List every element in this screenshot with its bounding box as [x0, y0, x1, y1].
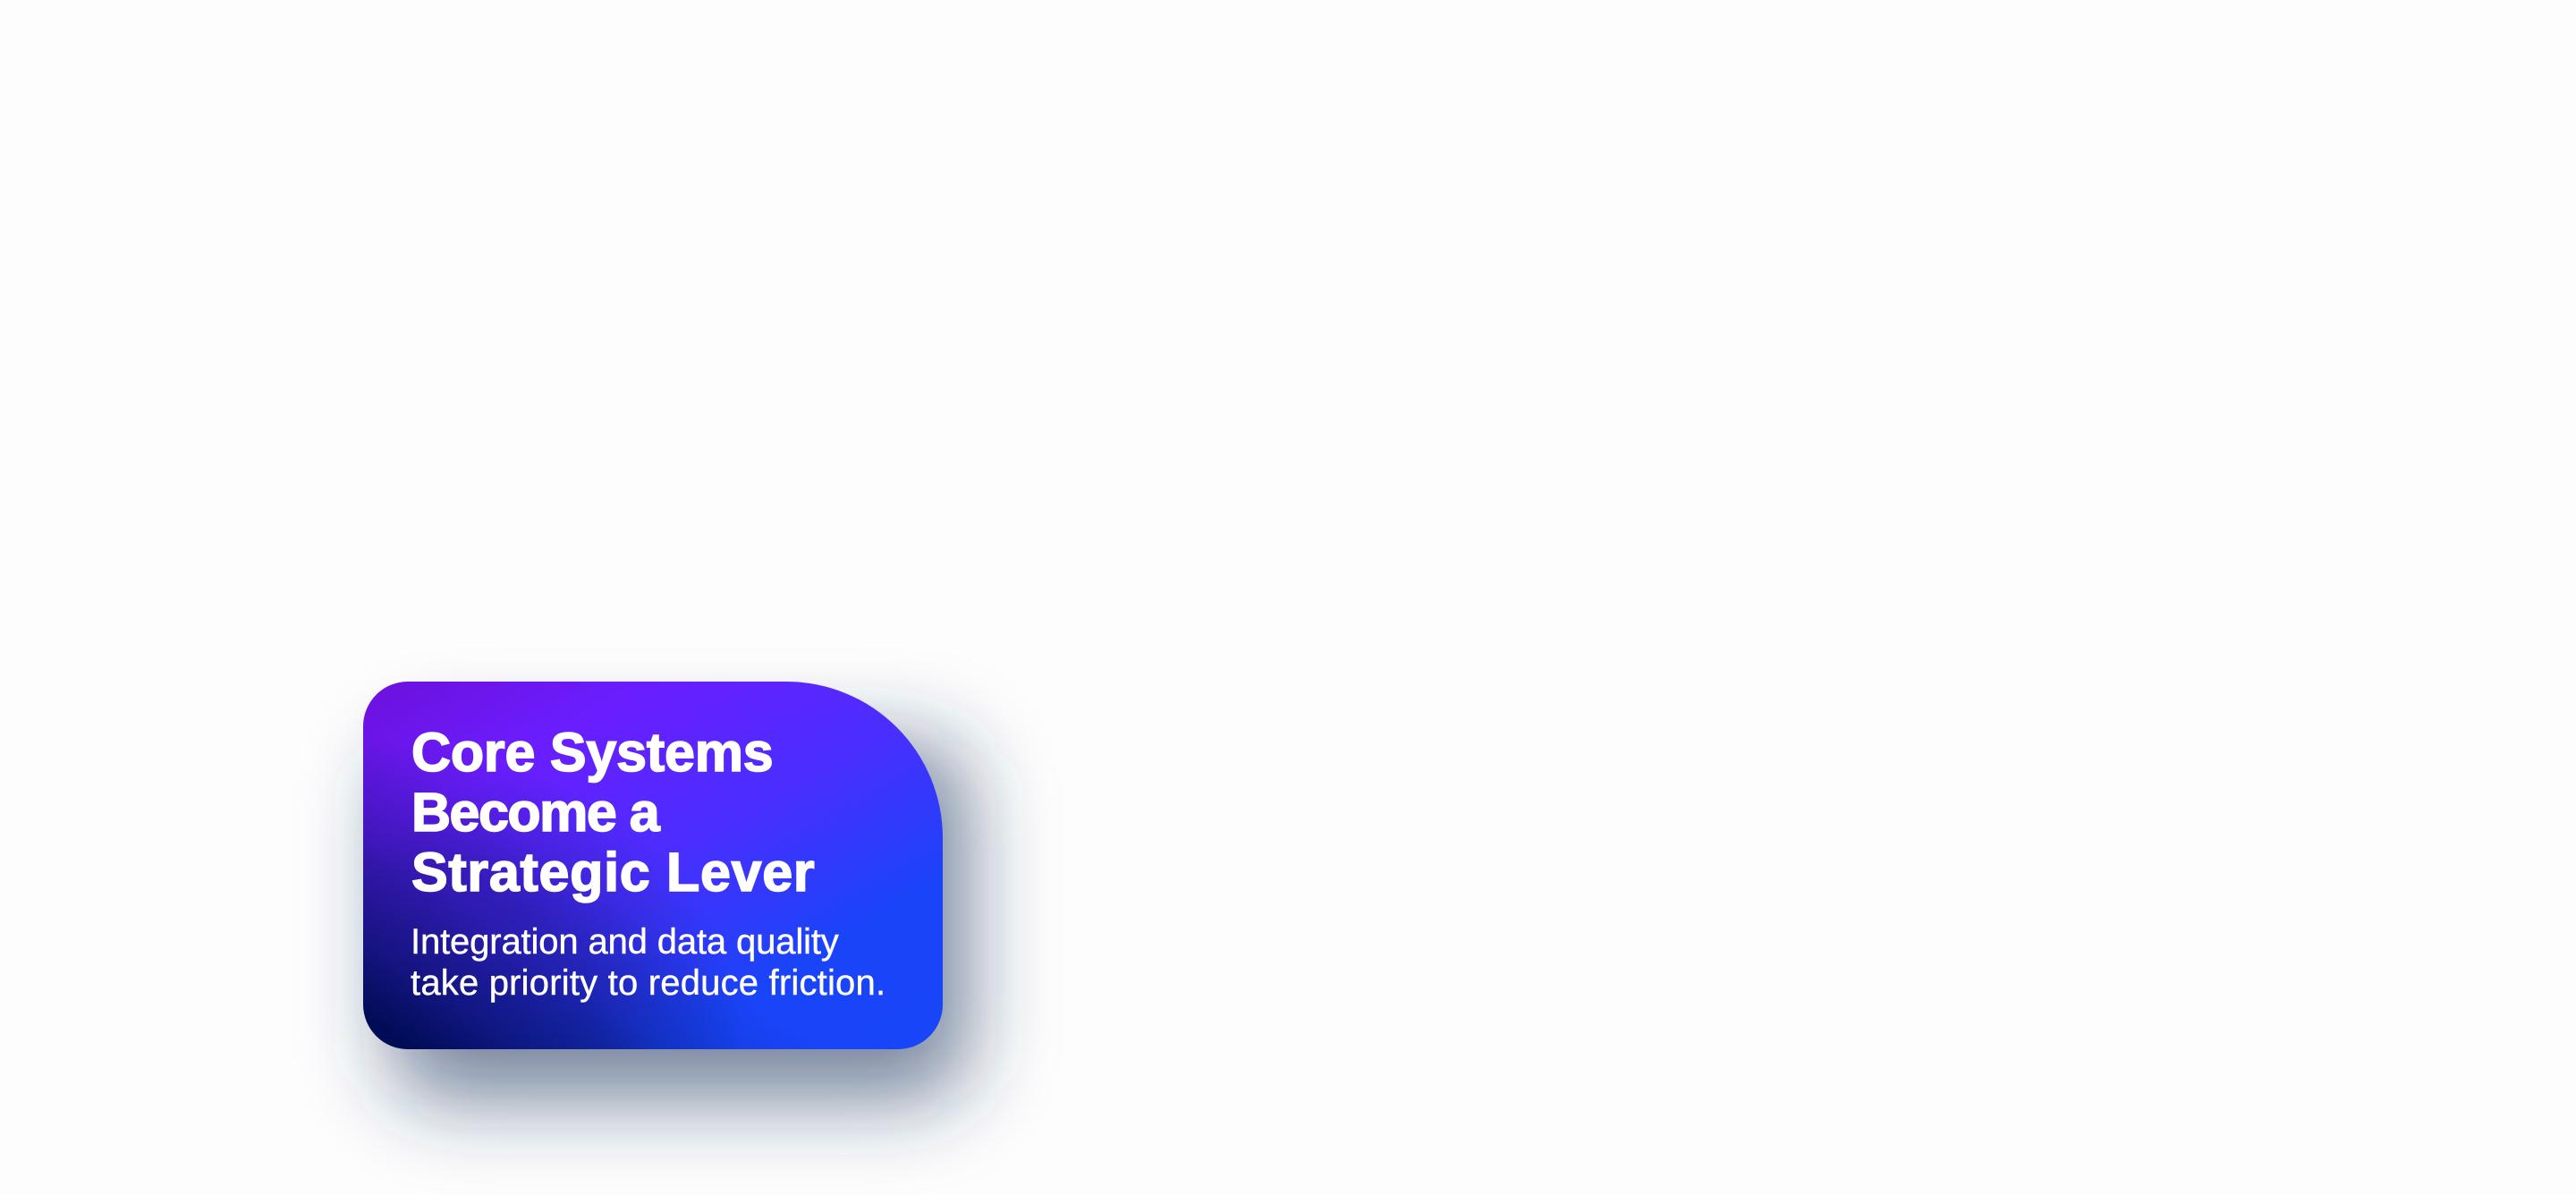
text block: subtitle: [411, 922, 886, 1003]
text block: subtitle: Integration and data quality: [411, 922, 839, 962]
heading: Core Systems: [411, 722, 773, 783]
panel: gradient callout card: [363, 682, 943, 1049]
heading: Strategic Lever: [411, 842, 815, 903]
heading: Become a: [411, 782, 658, 843]
text block: subtitle: take priority to reduce friction.: [411, 963, 886, 1003]
heading: [411, 722, 815, 903]
